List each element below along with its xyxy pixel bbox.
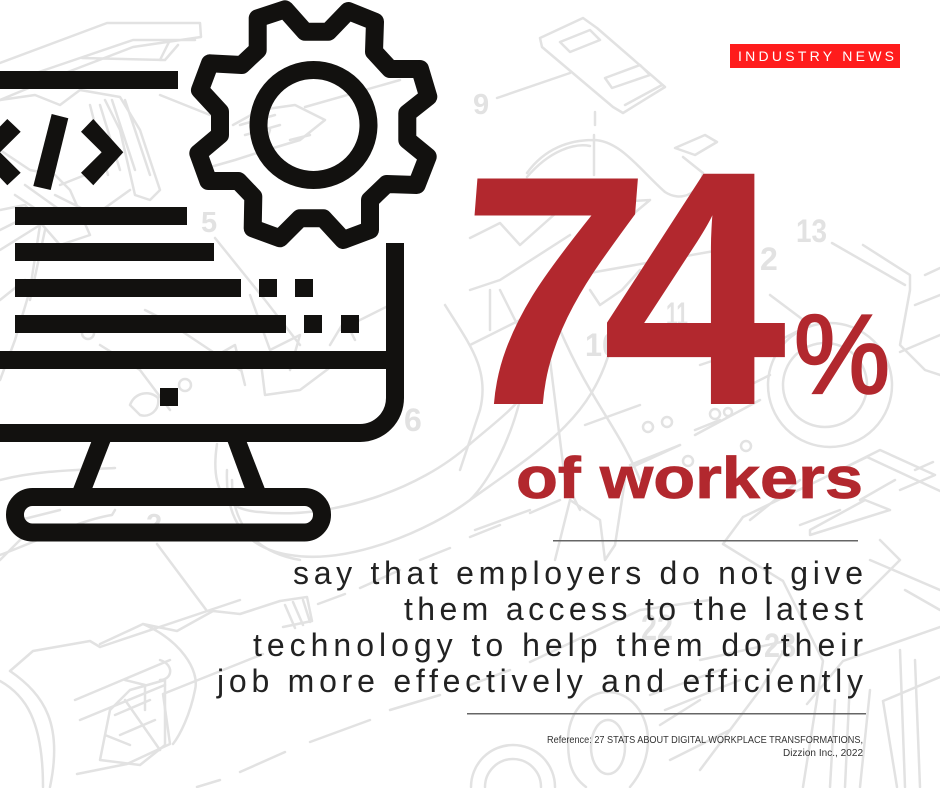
code lines	[0, 207, 395, 406]
big number: 74%	[439, 101, 890, 475]
reference citation	[547, 735, 863, 759]
icon: gear	[198, 9, 428, 240]
body statement: say that employers do not give	[293, 555, 863, 591]
background: part numbers: 2	[146, 509, 162, 541]
divider bottom	[467, 713, 866, 714]
big number: 74%: %	[794, 292, 890, 417]
reference citation: Dizzion Inc., 2022	[783, 748, 863, 759]
background: part numbers: 2	[760, 241, 778, 277]
background: part numbers: 10	[585, 327, 619, 363]
body statement: them access to the latest	[404, 591, 863, 627]
badge: industry news: INDUSTRY NEWS	[738, 48, 894, 64]
background: part numbers: 6	[404, 402, 422, 438]
background: part numbers: 22	[641, 607, 673, 648]
badge: industry news	[730, 44, 900, 68]
big number: 74%: 7	[439, 108, 658, 474]
background: part numbers: 13	[796, 213, 827, 249]
reference citation: Reference: 27 STATS ABOUT DIGITAL WORKPLACE TRANSFORMATIONS,	[547, 735, 863, 746]
monitor frame, stand and base	[0, 243, 395, 532]
divider top	[553, 540, 858, 542]
icon: computer monitor with code and gear	[0, 9, 428, 533]
body statement: job more effectively and efficiently	[216, 663, 863, 699]
background: part numbers: 11	[666, 296, 688, 332]
body statement: technology to help them do their	[253, 627, 863, 663]
icon: code brackets	[0, 114, 123, 190]
body statement	[216, 555, 863, 699]
background: part numbers: 23	[764, 627, 796, 665]
subheading: of workers: of workers	[516, 446, 863, 511]
big number: 74%: 4	[602, 101, 789, 475]
background: part numbers	[146, 89, 827, 665]
screen top line	[0, 71, 178, 89]
background: part numbers: 5	[201, 207, 217, 239]
background: part numbers: 9	[473, 89, 489, 121]
